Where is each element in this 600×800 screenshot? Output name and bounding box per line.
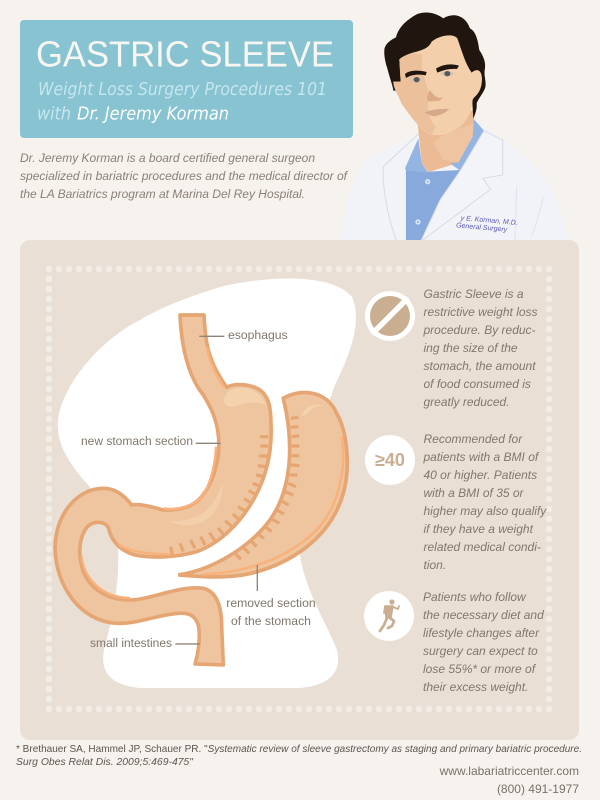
contact details — [439, 764, 579, 796]
footnote: * Brethauer SA, Hammel JP, Schauer PR. "Systematic review of sleeve gastrectomy as staging and primary bariatric procedure. — [16, 744, 582, 755]
text: expected weight loss: the necessary diet and — [423, 608, 544, 622]
brows — [405, 64, 459, 78]
stitches: removed section — [235, 417, 299, 559]
removed section — [178, 393, 347, 577]
highlights — [224, 388, 266, 407]
subtitle: with — [37, 104, 71, 124]
intro text block: the LA Bariatrics program at Marina Del Rey Hospital. — [20, 187, 305, 201]
nose and lips — [427, 90, 443, 102]
text: BMI recommendation: related medical condi- — [424, 540, 541, 554]
text: BMI recommendation: 40 or higher. Patients — [424, 468, 537, 482]
text: expected weight loss: lifestyle changes after — [423, 626, 540, 640]
text: restrictive procedure: greatly reduced. — [424, 395, 510, 409]
coat embroidery — [456, 215, 518, 234]
text: BMI recommendation — [422, 432, 547, 572]
text: expected weight loss: surgery can expect to — [423, 644, 538, 658]
lapels — [383, 134, 418, 242]
main panel — [20, 240, 579, 740]
coat embroidery: y E. Korman, M.D. — [459, 215, 518, 227]
icon: runner — [364, 591, 414, 641]
label: removed section of the stomach: removed section — [226, 596, 316, 610]
label: new stomach section: new stomach section — [81, 434, 193, 448]
face shadow — [393, 54, 436, 135]
icon: BMI 40 — [365, 435, 415, 485]
contact details: (800) 491-1977 — [497, 782, 579, 796]
stomach diagram — [55, 315, 347, 665]
coat — [342, 120, 568, 242]
intro text block — [20, 151, 349, 201]
text: restrictive procedure: procedure. By reduc- — [422, 323, 536, 337]
text: restrictive procedure: stomach, the amount — [424, 359, 536, 373]
text: restrictive procedure: ing the size of the — [424, 341, 518, 355]
text: restrictive procedure: restrictive weight loss — [424, 305, 538, 319]
text: expected weight loss: their excess weight. — [423, 680, 528, 694]
text: BMI recommendation: Recommended for — [424, 432, 523, 446]
shirt — [406, 170, 461, 242]
footnote — [16, 744, 582, 768]
buttons — [425, 179, 430, 184]
label: removed section of the stomach: of the stomach — [231, 614, 311, 628]
title banner — [20, 20, 353, 138]
coat embroidery: General Surgery — [456, 222, 508, 234]
icon: restriction sign — [365, 291, 415, 341]
leader lines — [175, 336, 257, 644]
text: BMI recommendation: patients with a BMI of — [422, 450, 540, 464]
icon: BMI 40: ≥40 — [375, 450, 405, 470]
intro text block: Dr. Jeremy Korman is a board certified general surgeon — [20, 151, 315, 165]
subtitle — [37, 80, 327, 124]
new stomach section and small intestine — [55, 315, 271, 665]
text: BMI recommendation: tion. — [424, 558, 446, 572]
heading: gastric sleeve: GASTRIC SLEEVE — [36, 34, 334, 74]
text: restrictive procedure — [422, 287, 538, 409]
face — [393, 35, 482, 135]
text: expected weight loss — [423, 590, 544, 694]
contact details: www.labariatriccenter.com — [439, 764, 579, 778]
neck — [417, 110, 474, 172]
hair back — [384, 13, 486, 118]
text: BMI recommendation: higher may also qualify — [424, 504, 547, 518]
text: BMI recommendation: with a BMI of 35 or — [424, 486, 525, 500]
label: esophagus: esophagus — [228, 328, 288, 342]
text: expected weight loss: lose 55%* or more of — [423, 662, 537, 676]
eyes — [410, 77, 423, 82]
footnote: Surg Obes Relat Dis. 2009;5:469-475" — [16, 757, 194, 768]
stitches: new stomach — [171, 437, 268, 555]
portrait of doctor — [342, 13, 568, 242]
subtitle: Weight Loss Surgery Procedures 101 — [38, 80, 327, 100]
text: restrictive procedure: Gastric Sleeve is a — [424, 287, 524, 301]
text: restrictive procedure: of food consumed is — [424, 377, 531, 391]
text: BMI recommendation: if they have a weight — [424, 522, 534, 536]
label: small intestines: small intestines — [90, 636, 172, 650]
collar — [450, 119, 484, 171]
intro text block: specialized in bariatric procedures and the medical director of — [20, 169, 349, 183]
subtitle: Dr. Jeremy Korman — [77, 104, 229, 124]
white blob background — [58, 278, 356, 688]
text: expected weight loss: Patients who follow — [423, 590, 527, 604]
label: removed section of the stomach — [226, 596, 316, 628]
